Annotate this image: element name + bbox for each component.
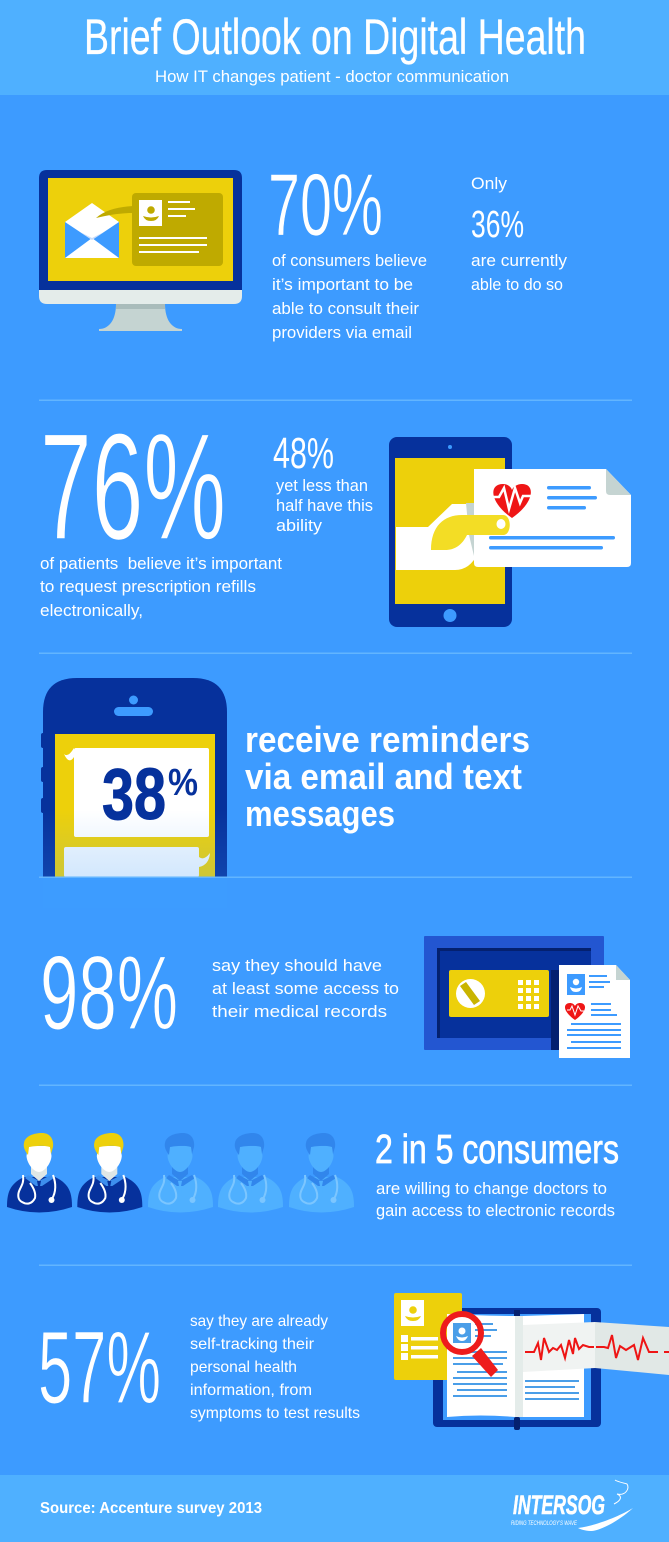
logo: INTERSOG	[511, 1480, 633, 1531]
stat: only 36%: are currently	[471, 251, 568, 270]
text: 98% description	[212, 956, 399, 1021]
icon: tablet with prescription	[389, 437, 631, 627]
text: 57% description: information, from	[190, 1382, 312, 1399]
panel: self-tracking	[38, 1293, 669, 1430]
text: 57% description: personal health	[190, 1359, 297, 1376]
text: 70% description: providers via email	[272, 323, 412, 342]
header band	[0, 0, 669, 95]
text: 57% description: symptoms to test results	[190, 1405, 360, 1422]
stat: 57%: 57%	[38, 1310, 161, 1425]
logo: INTERSOG: INTERSOG	[513, 1490, 605, 1520]
stat: 38%: 38	[102, 755, 166, 835]
text: doctor change description: gain access to electronic records	[376, 1201, 615, 1220]
text: 48% description: half have this	[276, 496, 373, 515]
stat: only 36%	[471, 174, 568, 294]
icon: smartphone with 38% message	[41, 678, 227, 877]
heading: reminders: receive reminders	[245, 719, 530, 760]
text: 70% description: able to consult their	[272, 299, 419, 318]
panel: medical records	[40, 935, 630, 1058]
panel: reminders	[39, 678, 632, 908]
text: 57% description	[190, 1313, 360, 1422]
icon: five doctors, two highlighted	[7, 1133, 354, 1212]
stat: 70%: 70%	[268, 155, 383, 254]
section dividers	[39, 400, 632, 1266]
stat: only 36%: Only	[471, 174, 508, 193]
heading: reminders: via email and text	[245, 756, 522, 797]
text: 76% description	[40, 554, 282, 620]
icon: health record book, magnifier and ECG strip	[394, 1293, 669, 1430]
panel: changing doctors	[7, 1126, 619, 1220]
logo: INTERSOG: RIDING TECHNOLOGY’S WAVE	[511, 1521, 578, 1527]
text: 76% description: electronically,	[40, 601, 143, 620]
icon: smartphone with 38% message: %	[168, 762, 198, 804]
text: 98% description: their medical records	[212, 1002, 387, 1021]
text: 57% description: self-tracking their	[190, 1336, 315, 1353]
text: 98% description: say they should have	[212, 956, 382, 975]
stat: only 36%: able to do so	[471, 275, 563, 294]
stat: 98%: 98%	[40, 935, 178, 1052]
text: 48% description	[276, 476, 373, 535]
phone reflection divider	[39, 876, 632, 908]
text: 48% description: ability	[276, 516, 323, 535]
panel: email consultation	[39, 155, 568, 342]
subtitle: How IT changes patient - doctor communication	[155, 67, 509, 86]
icon: safe with document	[424, 936, 630, 1058]
icon: desktop monitor with email	[39, 170, 242, 331]
text: 57% description: say they are already	[190, 1313, 328, 1330]
stat: 48%: 48%	[273, 429, 334, 478]
text: 48% description: yet less than	[276, 476, 368, 495]
text: 70% description	[272, 251, 427, 342]
text: doctor change description	[376, 1179, 615, 1220]
source: Source: Accenture survey 2013	[40, 1500, 262, 1517]
text: 76% description: to request prescription refills	[40, 577, 256, 596]
text: 98% description: at least some access to	[212, 979, 399, 998]
stat: 76%: 76%	[40, 402, 226, 572]
text: 70% description: it’s important to be	[272, 275, 413, 294]
heading: reminders	[245, 719, 530, 834]
text: 76% description: of patients believe it’s important	[40, 554, 282, 573]
panel: prescription refills	[40, 402, 631, 627]
text: 70% description: of consumers believe	[272, 251, 427, 270]
heading: reminders: messages	[245, 793, 395, 834]
stat: only 36%: 36%	[471, 204, 524, 246]
text: doctor change description: are willing to change doctors to	[376, 1179, 607, 1198]
footer band	[0, 1475, 669, 1542]
